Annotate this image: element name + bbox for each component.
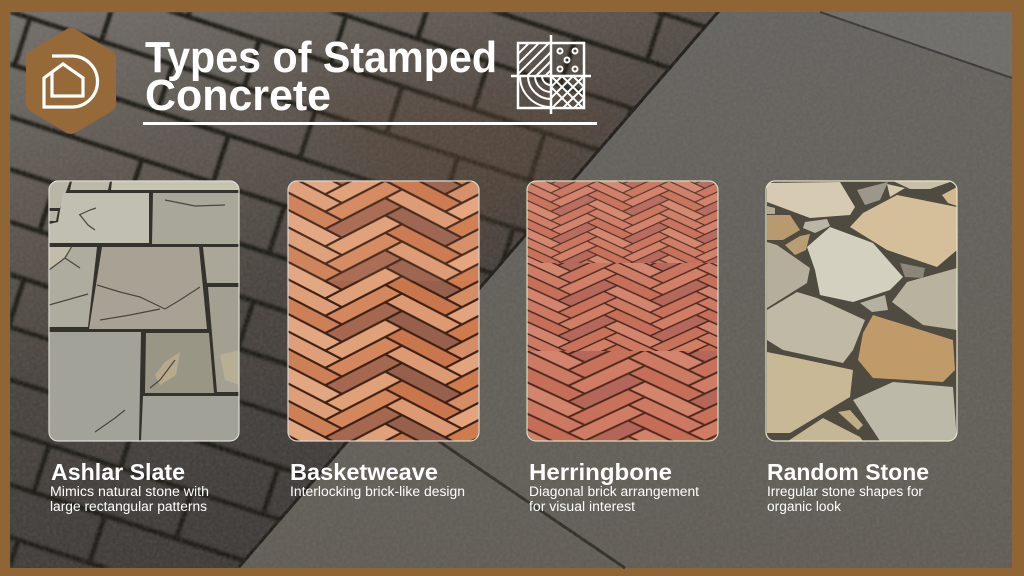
logo hexagon: [26, 28, 116, 134]
logo mark: [44, 56, 98, 107]
panel: Ashlar Slate: [49, 181, 239, 441]
card border: [766, 181, 957, 441]
label: Ashlar Slate: [50, 459, 209, 514]
image: irregular stones: [766, 181, 957, 441]
label: Basketweave: Basketweave: [290, 459, 438, 485]
label: Herringbone: Herringbone: [529, 459, 672, 485]
image: slate stones: [49, 181, 239, 441]
panel: Herringbone: [527, 181, 718, 441]
title: [145, 33, 497, 120]
title: Concrete: [145, 71, 331, 120]
panel: Random Stone: [766, 181, 957, 441]
title: Types of Stamped: [145, 33, 497, 82]
label: Random Stone: [767, 459, 929, 514]
stamped brick background: [10, 12, 730, 568]
label: Basketweave: [290, 459, 465, 499]
label: Herringbone: [529, 459, 699, 514]
label: Ashlar Slate: large rectangular patterns: [50, 499, 207, 514]
label: Herringbone: Diagonal brick arrangement: [529, 484, 699, 499]
card border: [49, 181, 239, 441]
label: Random Stone: Irregular stone shapes for: [767, 484, 924, 499]
image: orange brick herringbone: [288, 181, 479, 441]
card border: [527, 181, 718, 441]
label: Ashlar Slate: Ashlar Slate: [51, 459, 185, 485]
title underline: [143, 122, 597, 125]
label: Ashlar Slate: Mimics natural stone with: [50, 484, 209, 499]
icon: pattern grid: [510, 35, 591, 114]
label: Basketweave: Interlocking brick-like design: [290, 484, 465, 499]
image: red brick chevrons: [527, 181, 718, 441]
logo: [26, 28, 116, 134]
card border: [288, 181, 479, 441]
label: Random Stone: organic look: [767, 499, 841, 514]
panel: Basketweave: [288, 181, 479, 441]
label: Herringbone: for visual interest: [529, 499, 635, 514]
label: Random Stone: Random Stone: [767, 459, 929, 485]
